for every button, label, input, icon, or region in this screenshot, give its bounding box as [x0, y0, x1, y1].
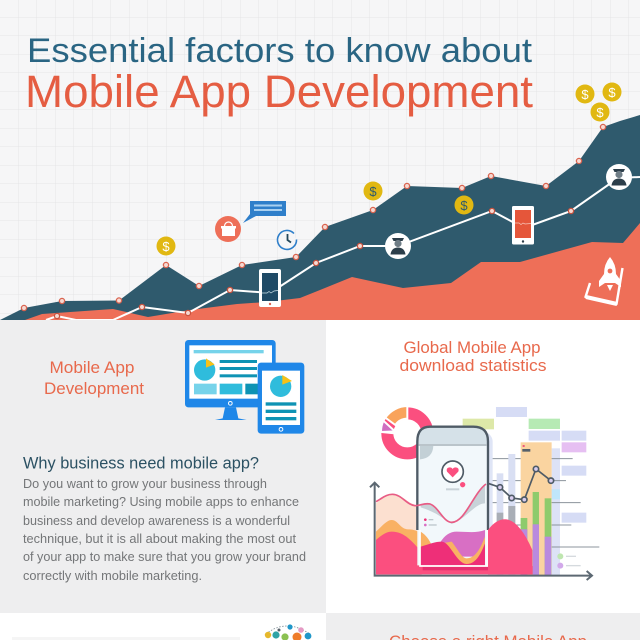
tablet: [258, 363, 304, 434]
panel: global statistics: [326, 320, 640, 613]
panel: header chart background: [0, 0, 640, 320]
icon: shopping bag badge: [215, 216, 241, 242]
pink base across the chart: [376, 566, 533, 574]
body text: business and develop awareness is a wonderful: [23, 514, 290, 528]
line series: [488, 466, 554, 502]
data points on trend line: [54, 208, 574, 319]
icon: person avatar right: [606, 164, 632, 190]
panel heading: [44, 358, 144, 398]
icon: coin stack: $: [608, 85, 616, 100]
icon: coin stack: $: [596, 105, 604, 120]
body text: of your app to make sure that you grow your brand: [23, 550, 306, 564]
title line 1: Essential factors to know about: [27, 32, 533, 70]
mini legend: [424, 518, 427, 521]
panel: bottom left: [0, 613, 326, 640]
panel heading: Development: [44, 379, 144, 398]
donut chart: [381, 406, 427, 453]
panel heading: download statistics: [400, 356, 546, 375]
front pink mound: [488, 519, 532, 574]
floating legend blocks: [463, 407, 586, 575]
title: [25, 32, 534, 117]
icon: coin 1: $: [162, 239, 170, 254]
body text: [23, 477, 306, 583]
grey guide lines: [487, 459, 599, 547]
icon: person avatar left: [385, 233, 411, 259]
white trend line: [46, 177, 640, 320]
icon: coin 3: [454, 196, 474, 214]
desktop monitor: [185, 340, 276, 420]
icon: phone with orange screen: [512, 206, 534, 244]
icon: rocket launching from tablet: [586, 257, 622, 304]
body text: technique, but it is all about making the most out: [23, 532, 297, 546]
icon: coin stack: $: [581, 87, 589, 102]
icon: chat bubble: [243, 201, 286, 223]
layered area charts: [376, 494, 432, 574]
icon: coin 3: $: [460, 198, 468, 213]
background bars: [497, 454, 515, 575]
area chart: growth: [0, 115, 640, 320]
pink curve: [376, 484, 486, 522]
icon: desktop and tablet: [185, 340, 304, 434]
orange column and bars: [521, 442, 552, 575]
heart badge: [442, 461, 463, 482]
icon: coin 2: [364, 182, 382, 200]
body text: Do you want to grow your business through: [23, 477, 267, 491]
phone body: [417, 427, 488, 566]
body text: correctly with mobile marketing.: [23, 569, 202, 583]
phone shadow: [423, 432, 493, 571]
panel heading: Global Mobile App: [404, 338, 540, 357]
lower right legend: [557, 553, 581, 569]
icon: clock: [278, 230, 297, 249]
panel: bottom right: [326, 613, 640, 640]
dark area series: [0, 115, 640, 320]
faint heading cut off by page edge: [12, 637, 240, 640]
icon: app gear cluster: [265, 624, 311, 640]
title line 2: Mobile App Development: [25, 66, 534, 117]
illustration: statistics chart with phone: [370, 406, 599, 580]
panel heading: Mobile App: [50, 358, 134, 377]
data points on dark area: [21, 124, 606, 311]
panel heading: [400, 338, 546, 375]
icon: phone with dark screen: [259, 269, 281, 307]
orange area series: [25, 223, 640, 320]
icon: coin stack: [576, 82, 622, 122]
subheading: Why business need mobile app?: [23, 454, 259, 472]
axes: [370, 483, 592, 580]
icon: coin 2: $: [369, 184, 377, 199]
body text: mobile marketing? Using mobile apps to enhance: [23, 495, 299, 509]
icon: coin 1: [156, 236, 176, 256]
panel: mobile app development: [0, 320, 326, 613]
